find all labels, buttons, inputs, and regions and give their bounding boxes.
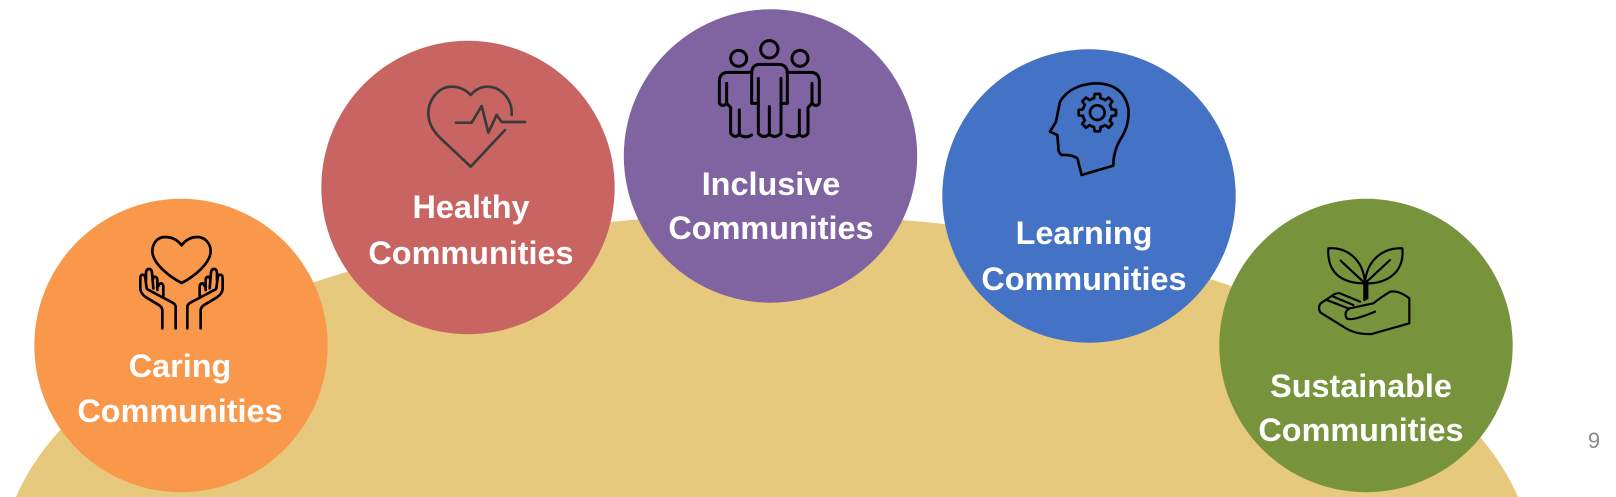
label: sustainable communities: Sustainable xyxy=(1270,368,1452,404)
label: caring communities: Communities xyxy=(77,393,283,429)
label: inclusive communities: Communities xyxy=(668,210,874,246)
label: sustainable communities: Communities xyxy=(1258,412,1464,448)
page number: 9 xyxy=(1588,428,1600,453)
panel: sustainable communities xyxy=(1219,199,1513,492)
panel: caring communities xyxy=(34,199,328,492)
icon: plant in hand xyxy=(1319,248,1409,334)
label: inclusive communities: Inclusive xyxy=(702,166,840,202)
panel: healthy communities xyxy=(321,41,615,334)
label: caring communities: Caring xyxy=(129,348,231,384)
label: learning communities: Learning xyxy=(1016,215,1152,251)
icon: heart with pulse xyxy=(428,87,525,167)
label: learning communities: Communities xyxy=(981,261,1187,297)
panel: inclusive communities xyxy=(624,9,917,303)
icon: group of people xyxy=(719,41,819,137)
icon: heart in hands xyxy=(140,237,223,328)
panel: learning communities xyxy=(942,49,1236,343)
label: healthy communities: Communities xyxy=(368,235,574,271)
yellow mound background xyxy=(16,214,1518,497)
icon: head with gear xyxy=(1050,83,1129,175)
label: healthy communities: Healthy xyxy=(412,189,530,225)
